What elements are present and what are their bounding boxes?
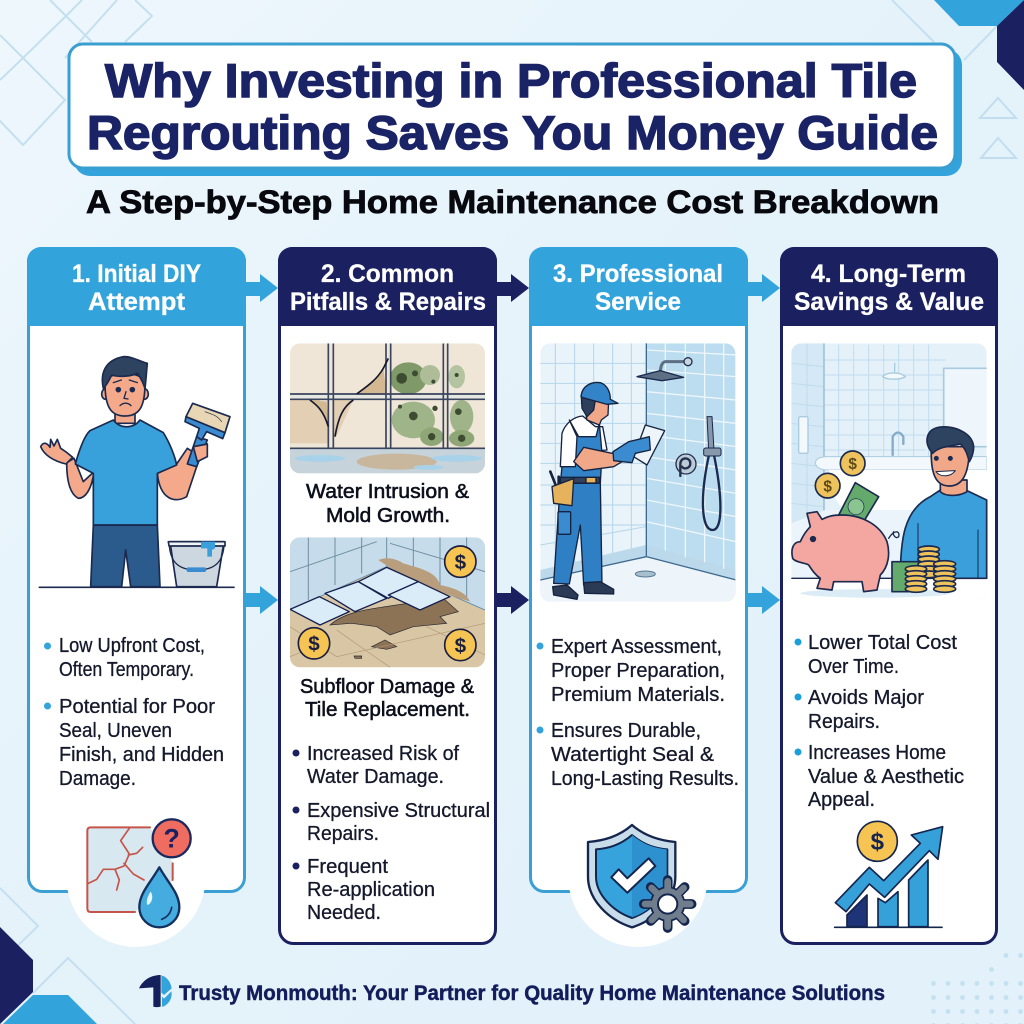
bullet list: step 1: Often Temporary. <box>59 659 194 681</box>
arrow: step 1 to 2 top <box>246 274 278 302</box>
heading: step 4: 4. Long-Term <box>811 260 966 288</box>
bullet list: step 4: Value & Aesthetic <box>808 766 964 788</box>
bullet list: step 2: Re-application <box>307 879 435 901</box>
bullet list: step 3: Long-Lasting Results. <box>551 768 739 790</box>
footer tagline: Trusty Monmouth: Your Partner for Quality Home Maintenance Solutions <box>179 982 885 1005</box>
icon: cracked tile with water drop <box>87 819 191 927</box>
bullet list: step 2: Repairs. <box>307 823 379 845</box>
illustration: subfloor damage <box>290 537 485 667</box>
illustration: piggy bank and happy homeowner: $ <box>848 456 857 473</box>
bullet list: step 4: Repairs. <box>808 711 880 733</box>
bullet list: step 1: Damage. <box>59 768 136 790</box>
caption: subfloor damage: Tile Replacement. <box>305 699 470 721</box>
heading: step 3: 3. Professional <box>553 260 723 288</box>
illustration: subfloor damage: $ <box>455 634 467 657</box>
icon: rising chart with dollar coin: $ <box>871 829 884 856</box>
bullet list: step 4: Lower Total Cost <box>808 632 957 654</box>
bullet list: step 3: Expert Assessment, <box>551 636 722 658</box>
heading: step 1: 1. Initial DIY <box>72 260 201 288</box>
panel: step 4 long-term savings and value <box>780 247 998 944</box>
icon: rising chart with dollar coin <box>835 821 943 927</box>
footer <box>139 975 885 1007</box>
heading: step 1 <box>72 260 201 316</box>
title: Regrouting Saves You Money Guide <box>87 106 938 159</box>
bullet list: step 4: Over Time. <box>808 656 899 678</box>
bullet list: step 3: Premium Materials. <box>551 684 725 706</box>
bullet list: step 4: Appeal. <box>808 789 875 811</box>
bullet list: step 1 <box>44 635 224 790</box>
heading: step 2 <box>290 260 486 316</box>
panel: step 1 initial DIY attempt <box>27 247 246 947</box>
icon: cracked tile with water drop: ? <box>164 824 180 854</box>
bullet list: step 3 <box>536 636 739 790</box>
bullet list: step 2 <box>292 743 490 924</box>
illustration: subfloor damage: $ <box>455 551 467 574</box>
title <box>87 54 938 159</box>
bullet list: step 1: Seal, Uneven <box>59 720 172 742</box>
title box <box>69 44 962 176</box>
bullet list: step 3: Ensures Durable, <box>551 720 701 742</box>
arrow: step 3 to 4 top <box>748 274 780 302</box>
caption: subfloor damage: Subfloor Damage & <box>300 676 475 698</box>
arrow: step 3 to 4 bottom <box>748 586 780 614</box>
heading: step 1: Attempt <box>88 288 186 316</box>
illustration: confused man with scraper and bucket <box>39 357 234 587</box>
arrow: step 2 to 3 top <box>497 274 529 302</box>
icon: shield with check and gear <box>588 825 692 928</box>
bullet list: step 2: Frequent <box>307 856 388 878</box>
illustration: piggy bank and happy homeowner <box>791 343 990 602</box>
heading: step 4: Savings & Value <box>794 288 984 316</box>
bullet list: step 3: Watertight Seal & <box>551 744 715 766</box>
bullet list: step 1: Low Upfront Cost, <box>59 635 205 657</box>
bullet list: step 2: Expensive Structural <box>307 800 490 822</box>
illustration: subfloor damage: $ <box>308 633 320 656</box>
bullet list: step 2: Needed. <box>307 902 381 924</box>
heading: step 3: Service <box>595 288 681 316</box>
heading: step 3 <box>553 260 723 316</box>
heading: step 2: 2. Common <box>321 260 454 288</box>
bullet list: step 2: Increased Risk of <box>307 743 459 765</box>
subtitle: A Step-by-Step Home Maintenance Cost Breakdown <box>86 184 939 220</box>
panel: step 2 common pitfalls and repairs <box>278 247 497 944</box>
logo: Trusty Monmouth <box>139 975 172 1007</box>
bullet list: step 1: Potential for Poor <box>59 696 215 718</box>
panel: step 3 professional service <box>529 247 748 947</box>
illustration: professional worker regrouting shower <box>540 343 736 602</box>
arrow: step 1 to 2 bottom <box>246 586 278 614</box>
caption: subfloor damage <box>300 676 475 721</box>
illustration: mold and water intrusion <box>290 343 485 473</box>
bullet list: step 4: Avoids Major <box>808 687 924 709</box>
illustration: piggy bank and happy homeowner: $ <box>823 478 832 495</box>
caption: water intrusion <box>306 481 470 527</box>
heading: step 4 <box>794 260 984 316</box>
bullet list: step 4: Increases Home <box>808 742 946 764</box>
caption: water intrusion: Water Intrusion & <box>306 481 470 503</box>
bullet list: step 1: Finish, and Hidden <box>59 744 224 766</box>
title: Why Investing in Professional Tile <box>105 54 917 107</box>
heading: step 2: Pitfalls & Repairs <box>290 288 486 316</box>
caption: water intrusion: Mold Growth. <box>326 505 450 527</box>
arrow: step 2 to 3 bottom <box>497 586 529 614</box>
bullet list: step 4 <box>794 632 964 811</box>
bullet list: step 2: Water Damage. <box>307 766 444 788</box>
bullet list: step 3: Proper Preparation, <box>551 660 725 682</box>
